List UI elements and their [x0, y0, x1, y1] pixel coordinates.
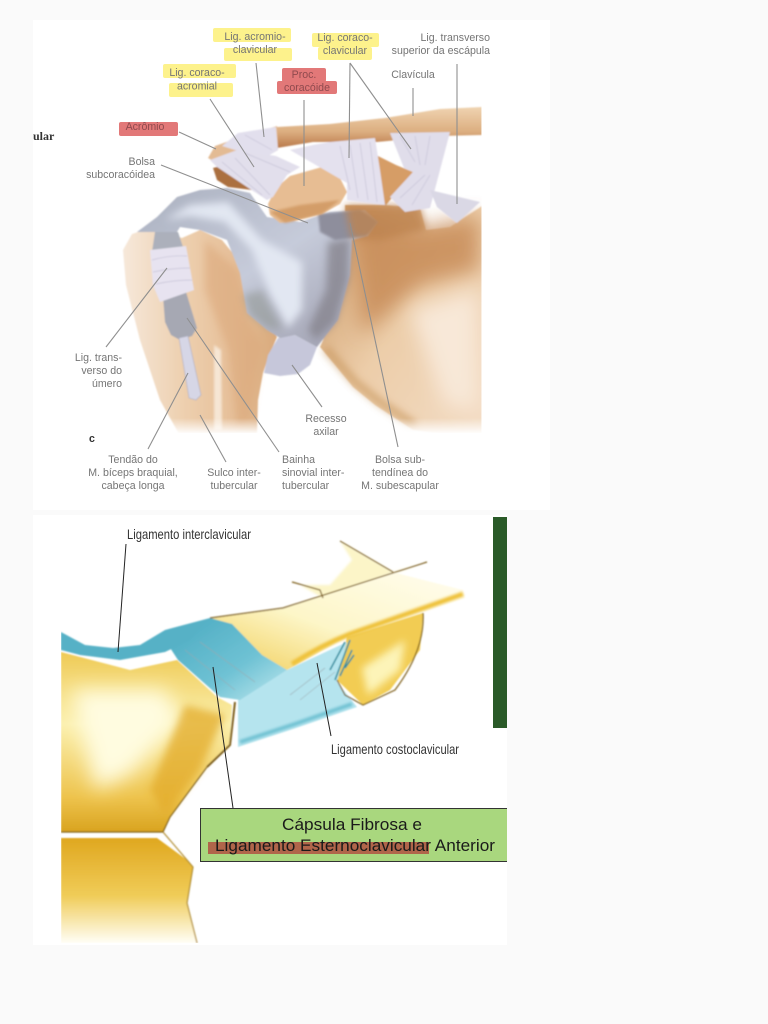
label: Lig. transverso superior da escápula: Lig. transverso — [421, 32, 490, 44]
label: Ligamento interclavicular: Ligamento interclavicular — [127, 526, 251, 542]
callout: Cápsula Fibrosa e Ligamento Esternoclavicular Anterior — [200, 808, 507, 862]
first rib upper fragment — [300, 541, 427, 598]
label: Lig. coraco-acromial: Lig. coraco- — [169, 67, 225, 79]
costoclavicular lower teal shading — [240, 704, 352, 742]
white panel: sternoclavicular joint — [33, 515, 507, 945]
capsule highlight — [165, 202, 302, 328]
label: Bolsa subcoracóidea: Bolsa — [128, 156, 155, 168]
label: Lig. coraco-acromial: acromial — [177, 80, 217, 92]
label: Bainha sinovial intertubercular: tubercular — [282, 480, 330, 492]
coracoid process lower part — [377, 156, 414, 206]
costoclavicular ligament — [238, 642, 357, 747]
label: Tendão do M. bíceps braquial: M. bíceps braquial, — [88, 467, 178, 479]
joint capsule — [137, 188, 378, 347]
clavicle — [210, 572, 465, 670]
scapular neck shading — [345, 205, 426, 240]
green side bar — [493, 517, 507, 728]
callout line 1: Cápsula Fibrosa e — [282, 816, 422, 834]
label: Lig. transverso superior da escápula: superior da escápula — [392, 45, 490, 57]
highlight: Lig. coraco-clavicular — [312, 33, 379, 60]
acromion underside — [213, 163, 252, 190]
label: Bolsa subcoracóidea: subcoracóidea — [86, 169, 155, 181]
illustration: shoulder anatomy — [118, 107, 483, 434]
panel letter c: c — [89, 433, 95, 445]
bone outlines — [61, 541, 427, 943]
label: Tendão do M. bíceps braquial: Tendão do — [108, 454, 158, 466]
biceps tendon — [179, 336, 201, 400]
illustration: sternoclavicular joint — [61, 541, 465, 943]
label: Lig. acromio-clavicular: clavicular — [233, 44, 278, 56]
label: Sulco intertubercular: Sulco inter- — [207, 467, 261, 479]
clavicle — [277, 107, 482, 148]
label: Lig. coraco-clavicular: clavicular — [323, 45, 368, 57]
infographic canvas — [33, 28, 507, 943]
trapezoid ligament — [290, 138, 385, 205]
costoclavicular dark fibres — [330, 640, 354, 680]
clavicle lower orange edge — [292, 594, 463, 664]
label: Bainha sinovial intertubercular: Bainha — [282, 454, 315, 466]
pale streak on humerus — [214, 345, 222, 430]
label: Ligamento costoclavicular: Ligamento costoclavicular — [331, 741, 459, 757]
label: Lig. transverso do úmero: verso do — [81, 365, 122, 377]
ligament fibres — [222, 135, 430, 205]
highlight: Lig. coraco-acromial — [163, 64, 236, 97]
label: Lig. transverso do úmero: Lig. trans- — [75, 352, 122, 364]
label: Acrômio: Acrômio — [126, 121, 165, 133]
label: Lig. acromio-clavicular: Lig. acromio- — [224, 31, 286, 43]
labels: shoulder — [75, 31, 490, 492]
sternal body — [61, 838, 197, 943]
biceps tendon upper part — [152, 232, 184, 252]
leader lines: shoulder — [106, 63, 457, 462]
manubrium pale centre — [72, 690, 180, 790]
scapula shadow — [352, 215, 480, 335]
highlight: Ligamento Esternoclavicular — [208, 842, 429, 854]
label: Recesso axilar: axilar — [313, 426, 339, 438]
cropped word at left margin: ular — [33, 129, 55, 143]
label: Sulco intertubercular: tubercular — [210, 480, 258, 492]
subscapular bursa — [318, 210, 378, 240]
axillary recess — [264, 335, 317, 376]
label: Lig. coraco-clavicular: Lig. coraco- — [317, 32, 373, 44]
label: Lig. transverso do úmero: úmero — [92, 378, 122, 390]
label: Tendão do M. bíceps braquial: cabeça longa — [101, 480, 165, 492]
first rib cartilage — [337, 613, 423, 705]
highlight: Proc. coracóide — [277, 68, 337, 94]
label: Proc. coracóide: Proc. — [292, 69, 316, 81]
label: Proc. coracóide: coracóide — [284, 82, 330, 94]
coracoacromial ligament — [210, 150, 300, 200]
transverse humeral ligament — [150, 246, 194, 302]
acromion — [208, 126, 278, 160]
humerus shaft shading — [203, 243, 254, 422]
acromioclavicular ligament — [222, 127, 278, 156]
label: Recesso axilar: Recesso — [305, 413, 347, 425]
callout line 2: Ligamento Esternoclavicular Anterior — [215, 837, 496, 855]
conoid ligament — [390, 132, 450, 212]
coracoid shade — [270, 200, 340, 223]
biceps tendon sheath — [163, 292, 197, 340]
superior transverse scapular ligament — [430, 190, 480, 223]
highlight: Acrômio — [119, 122, 178, 136]
first rib pale area — [362, 640, 405, 695]
scapula lower edge shading — [325, 348, 415, 425]
label: Bainha sinovial intertubercular: sinovial inter- — [282, 467, 345, 479]
highlight: Lig. acromio-clavicular — [213, 28, 292, 61]
label: Bolsa subtendínea do M. subescapular: Bolsa sub- — [375, 454, 425, 466]
label: Bolsa subtendínea do M. subescapular: M. subescapular — [361, 480, 439, 492]
white panel: shoulder — [33, 20, 550, 510]
label: Clavícula: Clavícula — [391, 69, 435, 81]
leader lines: sternoclavicular — [118, 544, 331, 808]
manubrium orange waist — [150, 705, 225, 815]
capsule dark rim — [308, 238, 350, 340]
capsule fibres — [185, 642, 335, 700]
coracoid process — [268, 167, 347, 223]
scapula pale area — [410, 290, 478, 410]
bottom fade — [172, 419, 482, 433]
humerus — [123, 228, 277, 434]
capsule lower-left shade — [243, 290, 282, 330]
scapula — [320, 205, 482, 434]
transverse ligament fibres — [152, 256, 192, 284]
sternoclavicular capsule — [165, 618, 287, 700]
manubrium — [61, 652, 232, 832]
label: Bolsa subtendínea do M. subescapular: tendínea do — [372, 467, 428, 479]
interclavicular ligament — [61, 618, 210, 660]
